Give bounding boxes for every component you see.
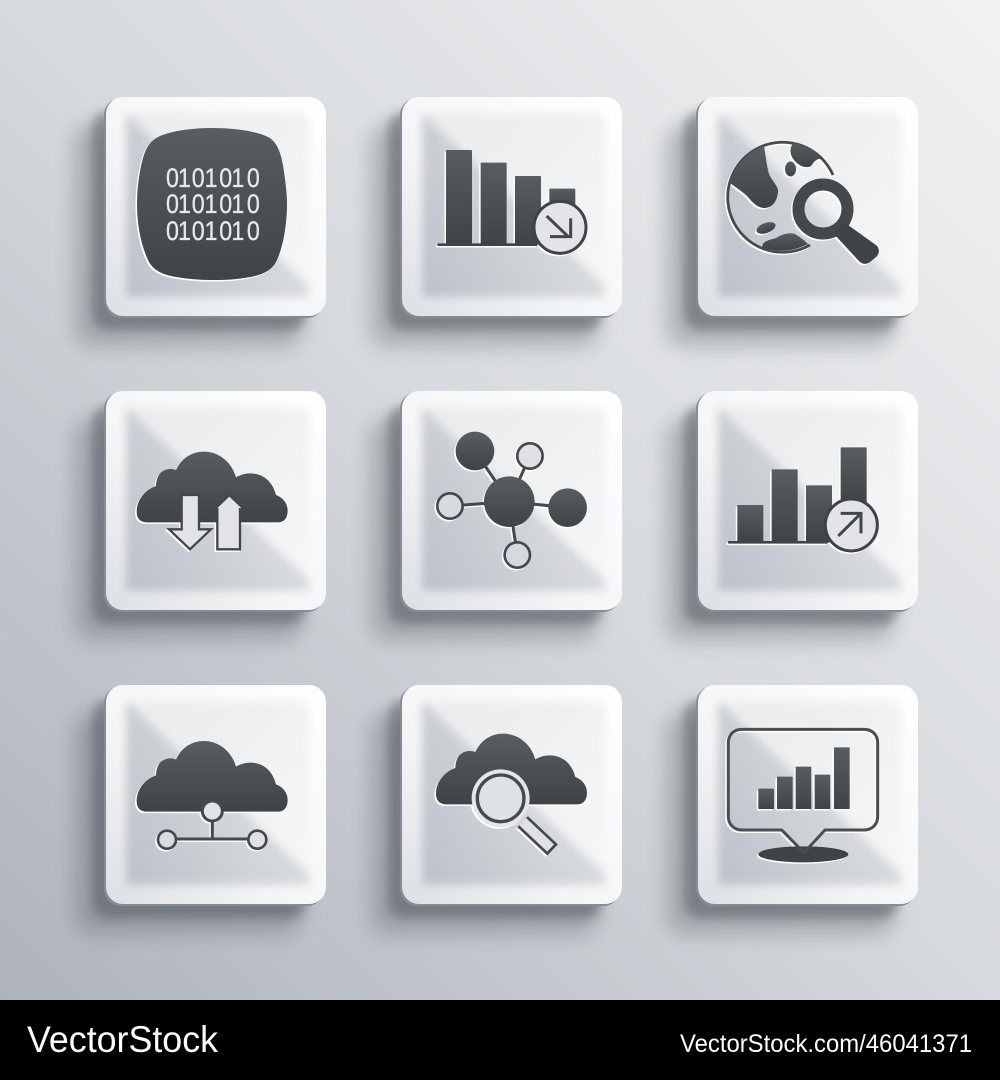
icon: speech pin with bars bbox=[728, 729, 878, 862]
tile: cloud search bbox=[370, 685, 622, 935]
brand name: VectorStock bbox=[27, 1019, 218, 1060]
tile: cloud upload download bbox=[74, 391, 326, 641]
icon: binary chip: 0101010 bbox=[166, 163, 260, 193]
tile: rising bar chart bbox=[666, 391, 918, 641]
icon: cloud with arrows bbox=[137, 452, 288, 549]
tile: binary code bbox=[74, 97, 326, 347]
icon: binary chip: 0101010 bbox=[166, 216, 260, 246]
icon: rising bars with arrow bbox=[728, 447, 877, 551]
tile: location chart bubble bbox=[666, 685, 918, 935]
image reference: VectorStock.com/46041371 bbox=[680, 1030, 972, 1058]
watermark footer band bbox=[0, 1000, 1000, 1080]
icon: falling bars with arrow bbox=[437, 150, 586, 253]
icon: cloud with magnifier bbox=[436, 734, 587, 850]
tile: network nodes bbox=[370, 391, 622, 641]
icon: binary chip bbox=[137, 128, 287, 280]
icon: molecule network bbox=[437, 432, 587, 568]
tile: globe search bbox=[666, 97, 918, 347]
tile: falling bar chart bbox=[370, 97, 622, 347]
tile: cloud network bbox=[74, 685, 326, 935]
icon: cloud with connected nodes bbox=[137, 741, 288, 849]
icon: binary chip: 0101010 bbox=[166, 189, 260, 219]
icon: globe with magnifier bbox=[728, 142, 877, 262]
